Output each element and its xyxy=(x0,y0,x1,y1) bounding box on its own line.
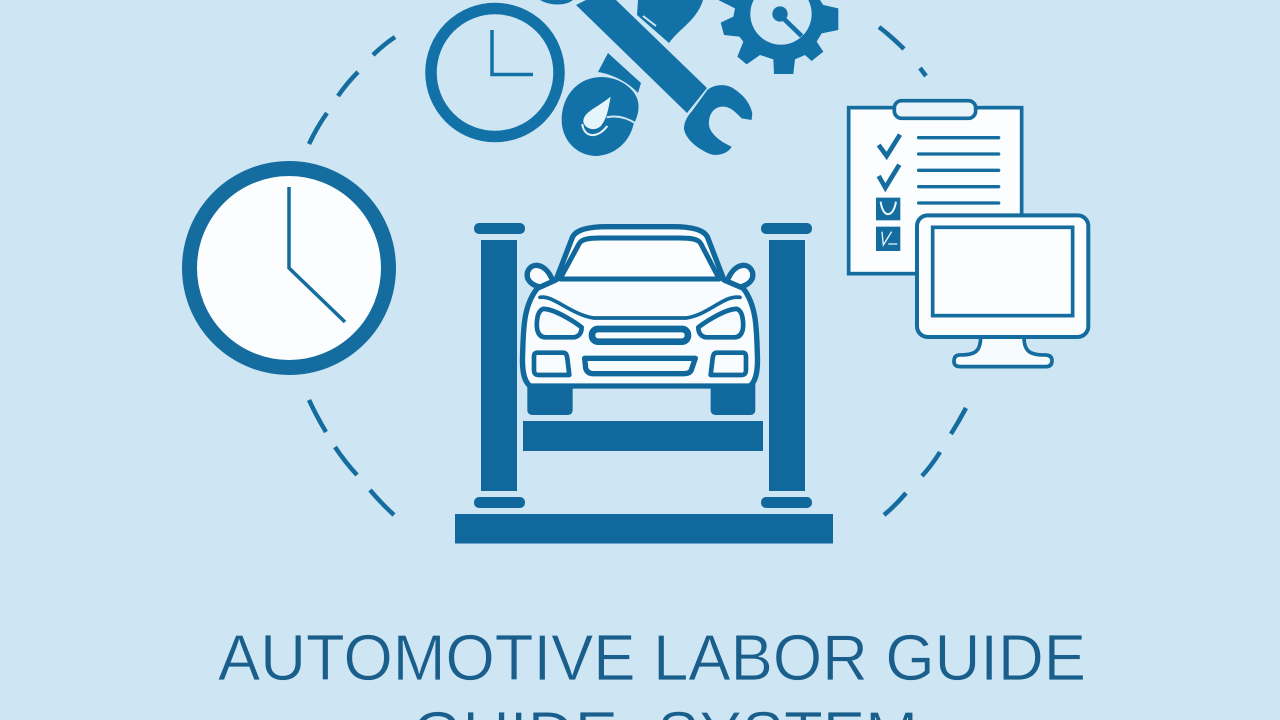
hood line xyxy=(540,297,740,318)
body outline xyxy=(522,227,758,386)
upper grille xyxy=(592,329,688,342)
fog lamps xyxy=(534,353,569,375)
icon: clipboard checklist xyxy=(849,101,1022,274)
icon: crossed wrenches xyxy=(540,0,752,156)
icon: gear xyxy=(718,0,838,74)
wrench open head xyxy=(684,85,752,155)
lift posts and base xyxy=(455,223,833,544)
checkbox squares xyxy=(876,198,900,251)
windshield xyxy=(560,238,719,279)
car front view xyxy=(522,227,758,415)
lower left wrench stem xyxy=(598,53,641,93)
lower left socket head with oil drop xyxy=(562,77,639,156)
upper left wrench tip xyxy=(540,0,573,4)
side mirrors xyxy=(527,265,552,287)
wrench handle xyxy=(576,0,707,113)
icon: car on lift xyxy=(455,223,833,544)
icon: small clock xyxy=(431,8,559,136)
upper right wrench end xyxy=(637,0,703,43)
headlights xyxy=(537,309,582,337)
checklist lines xyxy=(919,138,999,203)
icon: large wall clock xyxy=(190,168,388,368)
title: AUTOMOTIVE LABOR GUIDE xyxy=(218,621,1086,694)
check marks xyxy=(879,135,900,188)
icon: computer monitor xyxy=(917,215,1088,367)
dashed orbit ring xyxy=(309,27,966,515)
lower grille xyxy=(585,358,695,374)
